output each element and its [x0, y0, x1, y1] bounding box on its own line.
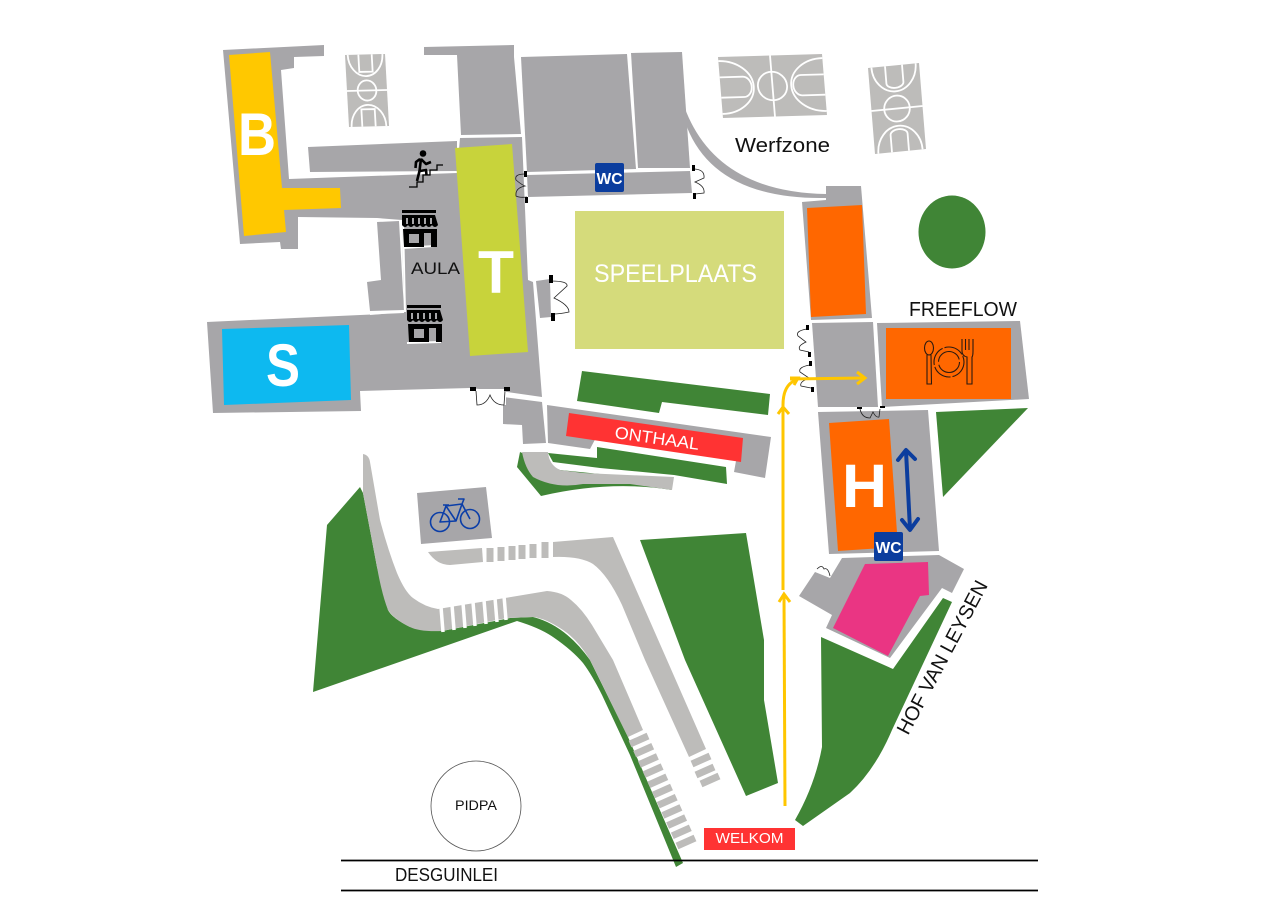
basketball court middle [718, 54, 827, 118]
label: Werfzone: Werfzone [735, 135, 830, 157]
doors [475, 169, 880, 576]
green areas [313, 196, 1028, 867]
building freeflow restaurant [886, 328, 1011, 399]
panel: speelplaats: SPEELPLAATS [594, 260, 757, 288]
basketball court left [345, 54, 389, 127]
building S [222, 325, 351, 405]
crosswalk stripes: long path [630, 736, 719, 846]
icon: plate and cutlery [924, 339, 973, 384]
icon: shop top [402, 210, 438, 247]
PIDPA circle: PIDPA [455, 797, 498, 813]
white corridors and shop bases [370, 220, 441, 343]
basketball court right [868, 63, 926, 154]
icon: WC H building [874, 532, 903, 561]
building complex: main left wing [207, 45, 551, 444]
building complex: orange block shell [799, 186, 1029, 658]
welkom label [704, 828, 795, 850]
icon: WC top [595, 163, 624, 192]
label: FREEFLOW: FREEFLOW [909, 299, 1017, 321]
arrow: blue double [898, 450, 918, 530]
building B: B [238, 101, 276, 168]
icon: WC H building: WC [876, 540, 902, 557]
building H: H [842, 452, 887, 520]
onthaal label: ONTHAAL [614, 423, 700, 454]
crosswalk stripes: middle path [490, 542, 545, 562]
icon: WC top: WC [596, 171, 623, 188]
icon: bicycle parking [417, 487, 492, 544]
building orange top [807, 205, 866, 317]
building T: T [478, 239, 514, 306]
building H [829, 419, 898, 551]
welkom label: WELKOM [716, 831, 784, 847]
building B [229, 52, 341, 236]
building pink [833, 562, 929, 656]
bike paths [363, 452, 706, 757]
crosswalk stripes [441, 596, 506, 632]
PIDPA circle [431, 761, 521, 851]
road: Desguinlei: DESGUINLEI [395, 865, 498, 885]
onthaal building shell [547, 405, 771, 478]
building complex: top rooms and WC hall [521, 52, 826, 198]
arrow: yellow route upper [778, 372, 865, 590]
onthaal label [566, 413, 743, 462]
building S: S [266, 332, 300, 399]
icon: shop bottom [407, 305, 443, 342]
panel: speelplaats [575, 211, 784, 349]
arrow: yellow route lower [779, 594, 790, 806]
icon: bicycle [430, 499, 480, 532]
icon: person on stairs [409, 150, 443, 187]
door jambs [470, 165, 885, 409]
road: Desguinlei [341, 860, 1038, 890]
label: AULA: AULA [411, 259, 461, 278]
building T [455, 144, 528, 356]
label: HOF VAN LEYSEN: HOF VAN LEYSEN [893, 577, 993, 738]
